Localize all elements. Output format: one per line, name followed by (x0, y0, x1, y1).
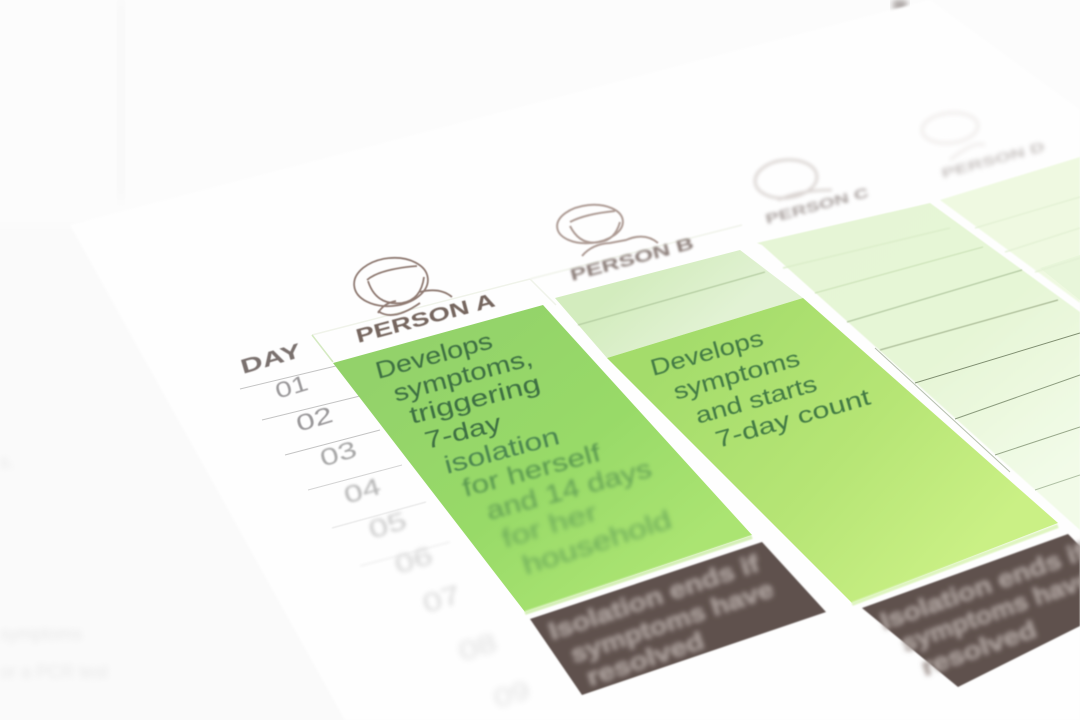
icon: person A (352, 254, 452, 315)
person C: icon and label (753, 157, 870, 227)
person C label: PERSON C (764, 184, 870, 227)
day row lines (240, 365, 450, 566)
column A symptoms text: 7-day (422, 410, 504, 455)
day numbers: 03 (317, 436, 360, 473)
day numbers: 04 (341, 473, 384, 510)
day numbers (272, 370, 533, 714)
column B symptoms text: and starts (692, 370, 820, 429)
column B symptoms text (647, 325, 874, 453)
column B symptoms text: 7-day count (712, 383, 874, 453)
column A symptoms text: isolation (441, 422, 563, 480)
column A: dark result box (530, 542, 826, 695)
day numbers: 08 (455, 627, 500, 667)
column B: pale rows above (555, 250, 803, 358)
column B: dark result box: resolved (918, 616, 1040, 682)
column A symptoms text: and 14 days (483, 453, 655, 526)
column D: pale green rows (940, 157, 1080, 303)
column B: dark result box (862, 534, 1080, 687)
faint text on lower sheet: s. (0, 452, 14, 472)
column B: dark result box: Isolation ends if (877, 538, 1080, 636)
column C: pale green rows (757, 203, 1080, 530)
person A: icon and label (352, 254, 498, 348)
column A symptoms text: for herself (459, 439, 604, 503)
day numbers: 06 (392, 542, 436, 580)
header frame lines (312, 225, 742, 362)
column A symptoms text: triggering (407, 370, 543, 430)
column A: dark result box: resolved (583, 627, 708, 692)
column A: dark result box: Isolation ends if (545, 550, 764, 646)
column B symptoms text: symptoms (670, 345, 803, 405)
column A symptoms text: for her (498, 496, 601, 554)
person B label: PERSON B (568, 234, 696, 285)
column A light footer strip (525, 537, 752, 613)
column B: green block (607, 298, 1058, 603)
day numbers: 07 (419, 579, 464, 619)
icon: person B (555, 202, 658, 256)
column A symptoms text: household (519, 504, 675, 581)
day column (238, 340, 533, 714)
icon: person D (921, 110, 985, 160)
column B symptoms text: Develops (647, 325, 766, 381)
day numbers: 09 (490, 675, 533, 714)
icon: person C (753, 157, 832, 201)
column A: green block (333, 305, 752, 612)
person A label: PERSON A (354, 290, 498, 348)
day numbers: 05 (366, 507, 410, 545)
person D: icon and label (921, 110, 1046, 181)
row lines (783, 228, 1080, 490)
day numbers: 01 (272, 370, 311, 404)
faint text on lower sheet: symptoms (0, 624, 82, 644)
column B: dark result box: symptoms have (898, 565, 1080, 658)
person B: icon and label (555, 202, 696, 285)
faint text on lower sheet: or a PCR test (0, 662, 108, 682)
faint text on lower sheet (0, 452, 108, 682)
column A symptoms text (373, 328, 675, 581)
column B light footer strip (852, 526, 1058, 604)
column A symptoms text: Develops (373, 328, 495, 385)
column A symptoms text: symptoms, (391, 345, 536, 408)
column A: dark result box: symptoms have (567, 576, 777, 669)
day heading: DAY (238, 340, 305, 379)
person D label: PERSON D (940, 139, 1046, 181)
day numbers: 02 (293, 401, 336, 437)
